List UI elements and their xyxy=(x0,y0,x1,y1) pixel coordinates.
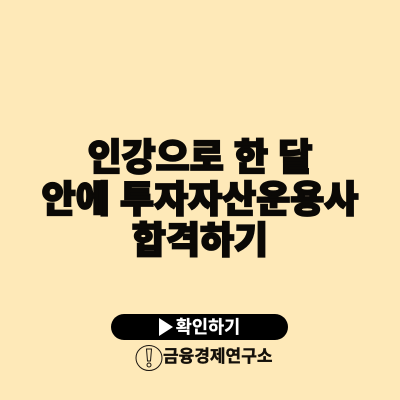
title: 안에 투자자산운용사 xyxy=(42,179,358,220)
icon: exclamation circle xyxy=(136,345,162,371)
button: 확인하기 xyxy=(111,314,288,340)
title: 합격하기 xyxy=(132,220,268,261)
title: 인강으로 한 달 xyxy=(88,137,312,178)
button: 확인하기: 확인하기 xyxy=(176,317,240,337)
brand name: 금융경제연구소 xyxy=(163,347,272,366)
